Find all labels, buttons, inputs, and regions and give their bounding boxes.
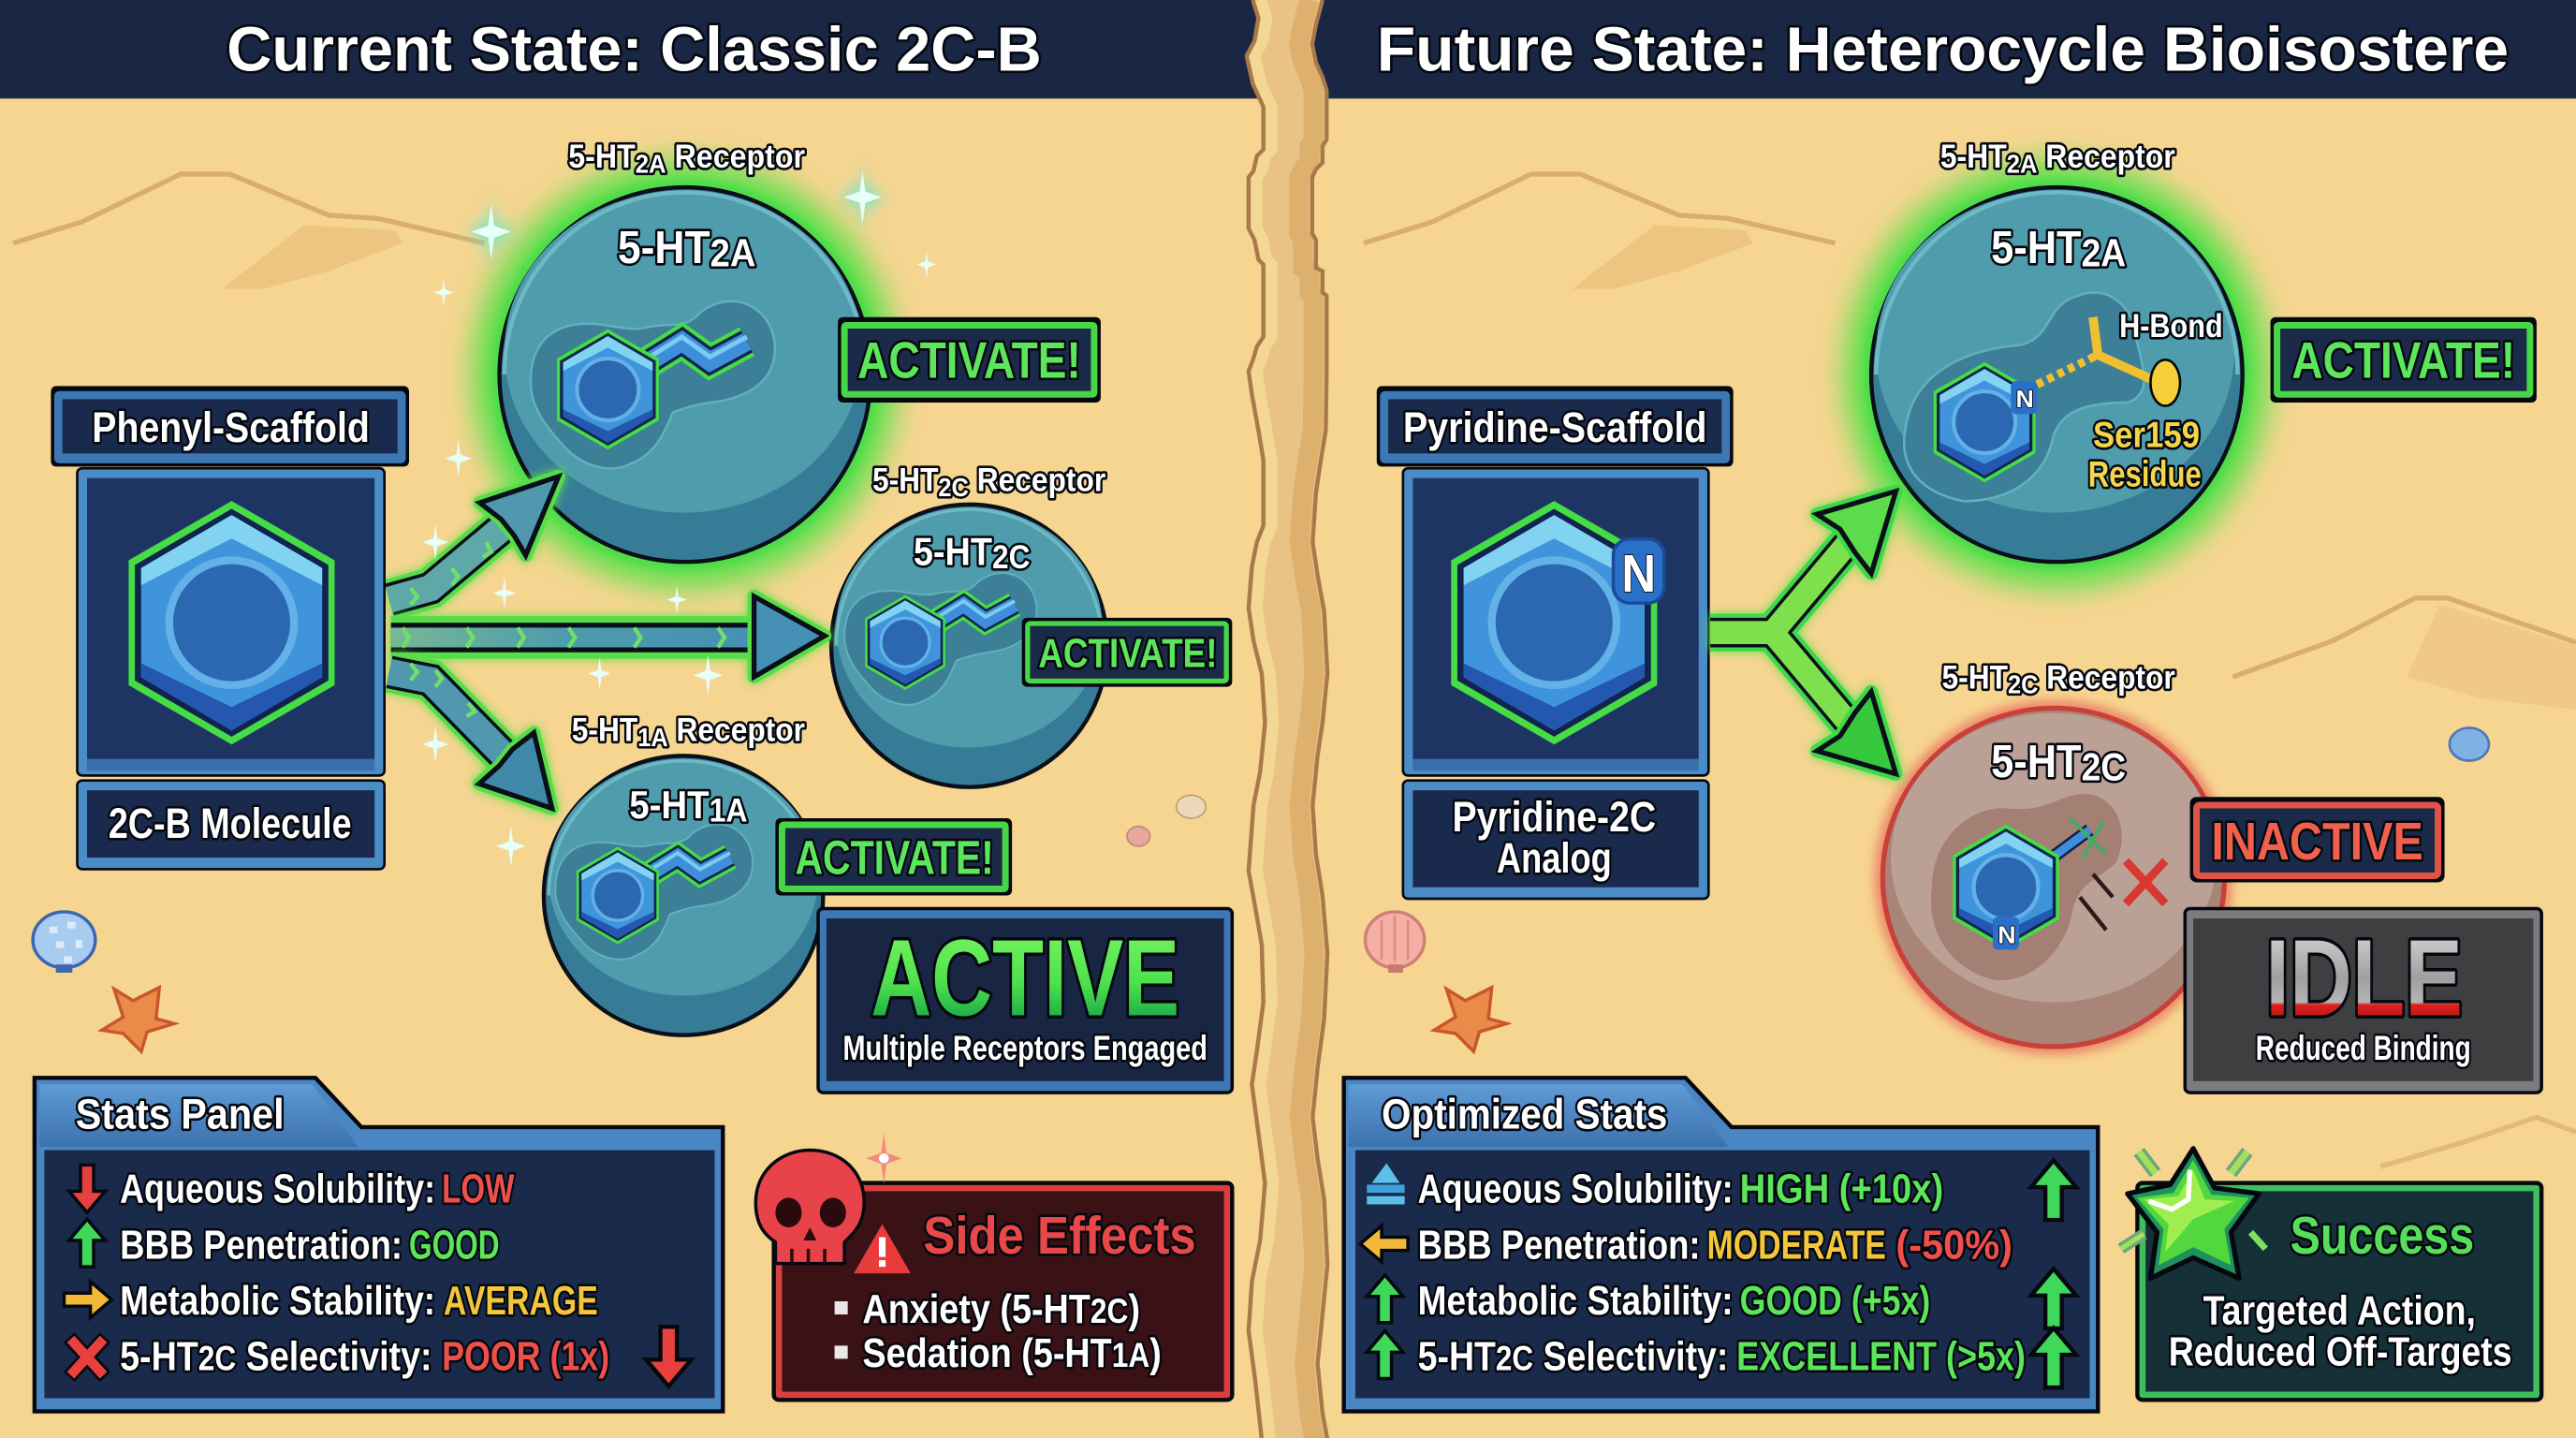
badge: INACTIVE — [2190, 797, 2445, 882]
stat: selectivity: POOR (1x) — [442, 1334, 609, 1380]
header: current state: Current State: Classic 2C-B — [227, 15, 1042, 84]
icon: pyridine hexagon — [1451, 501, 1657, 744]
receptor: 5-HT2C left — [831, 505, 1107, 787]
receptor: 5-HT2A left — [473, 161, 897, 588]
icon: hydrogen bond to Ser159 — [2037, 317, 2180, 405]
stat: aqueous solubility: Aqueous Solubility: — [1418, 1167, 1734, 1212]
arrow: phenyl to 5-HT1A — [389, 664, 552, 808]
stat: BBB penetration — [1360, 1222, 2012, 1268]
stat: BBB penetration: BBB Penetration: — [120, 1222, 402, 1268]
status: IDLE: IDLE — [2265, 917, 2463, 1039]
status: IDLE — [2185, 909, 2541, 1093]
label: 5-HT1A in circle: 1A — [710, 793, 748, 829]
starfish: right — [1434, 988, 1506, 1051]
label: Pyridine-2C Analog: Pyridine-2C — [1453, 793, 1656, 841]
label: 5-HT1A receptor: 1A — [637, 723, 668, 752]
stat: selectivity — [69, 1327, 691, 1387]
stat: BBB penetration: BBB Penetration: — [1418, 1222, 1701, 1268]
header: current state — [0, 0, 1268, 98]
label: H-Bond: H-Bond — [2119, 308, 2223, 345]
badge: ACTIVATE right — [2271, 317, 2537, 403]
label: 5-HT2C receptor: 2C — [938, 473, 969, 502]
panel: stats — [35, 1078, 723, 1412]
shell: pink — [1365, 912, 1425, 973]
arrow: pyridine fork to receptors — [1710, 492, 1895, 774]
list: Sedation: Sedation (5-HT1A) — [862, 1330, 1162, 1376]
icon: phenyl molecule — [865, 595, 1015, 690]
sparkles: activation — [422, 163, 936, 867]
label: Ser159 Residue: Ser159 — [2093, 415, 2200, 455]
header: future state: Future State: Heterocycle Bioisostere — [1377, 15, 2509, 84]
icon: warning triangle — [851, 1221, 914, 1275]
label: Phenyl-Scaffold: Phenyl-Scaffold — [92, 404, 370, 451]
stat: selectivity: EXCELLENT (>5x) — [1736, 1334, 2026, 1380]
heading: Side Effects: Side Effects — [923, 1206, 1196, 1265]
stat: aqueous solubility: HIGH (+10x) — [1740, 1167, 1943, 1212]
status: ACTIVE: Multiple Receptors Engaged — [842, 1029, 1208, 1067]
dune: upper right — [1364, 174, 1835, 289]
label: 5-HT2C in circle: 5-HT — [914, 530, 1001, 574]
badge: ACTIVATE 1A left — [775, 818, 1012, 895]
status: ACTIVE — [818, 909, 1232, 1093]
text: Targeted Action — [2169, 1288, 2512, 1374]
label: Ser159 Residue: Residue — [2088, 454, 2202, 494]
label: Phenyl-Scaffold — [51, 386, 409, 466]
label: 5-HT2A receptor: 5-HT — [568, 139, 641, 175]
status: IDLE: Reduced Binding — [2256, 1029, 2471, 1067]
divider: sand path between panels — [1247, 0, 1327, 1438]
label: 5-HT2C in circle: 2C — [992, 539, 1030, 576]
stat: selectivity: 5-HT2C Selectivity: — [1418, 1334, 1728, 1380]
badge: ACTIVATE 2A left — [838, 317, 1101, 403]
label: 5-HT2A receptor right: Receptor — [2037, 139, 2175, 175]
stat: BBB penetration: (-50%) — [1895, 1222, 2012, 1268]
stat: metabolic stability — [1367, 1269, 2076, 1328]
panel: side effects — [774, 1183, 1232, 1400]
header: future state — [1311, 0, 2576, 98]
label: Pyridine-Scaffold — [1377, 386, 1734, 466]
panel: success — [2137, 1183, 2541, 1400]
stat: metabolic stability: GOOD (+5x) — [1740, 1278, 1930, 1324]
icon: benzene hexagon — [128, 501, 335, 744]
stat: aqueous solubility: Aqueous Solubility: — [120, 1167, 435, 1212]
label: Pyridine-Scaffold: Pyridine-Scaffold — [1403, 404, 1707, 451]
icon: pyridine molecule: N — [2016, 385, 2034, 413]
dune: upper left — [13, 174, 485, 289]
status: ACTIVE: ACTIVE — [871, 917, 1179, 1039]
stat: BBB penetration: MODERATE — [1707, 1222, 1886, 1268]
label: 5-HT1A in circle: 5-HT — [629, 783, 717, 827]
badge: INACTIVE: INACTIVE — [2211, 812, 2423, 871]
icon: N badge: N — [1621, 544, 1656, 603]
label: 5-HT2A in circle: 2A — [2082, 230, 2126, 274]
label: 5-HT2A receptor: 2A — [636, 149, 666, 178]
arrow: phenyl to 5-HT2A — [389, 477, 559, 605]
label: 5-HT2C receptor right: Receptor — [2038, 659, 2175, 696]
stat: metabolic stability: Metabolic Stability: — [1418, 1278, 1734, 1324]
icon: red sparkle — [866, 1133, 902, 1183]
icon: skull — [755, 1151, 864, 1264]
stat: selectivity: 5-HT2C Selectivity: — [120, 1334, 432, 1380]
badge: ACTIVATE 2C left — [1022, 618, 1232, 687]
icon: phenyl molecule — [557, 330, 747, 449]
icon: green star — [2121, 1149, 2265, 1278]
arrow: phenyl to 5-HT2C — [391, 596, 825, 677]
stat: BBB penetration: GOOD — [409, 1222, 500, 1268]
icon: N badge — [1614, 539, 1664, 603]
dune: middle right — [2232, 598, 2576, 710]
stat: metabolic stability: AVERAGE — [444, 1278, 598, 1324]
label: 5-HT2C receptor: 5-HT — [872, 462, 945, 499]
heading: Success: Success — [2291, 1206, 2474, 1265]
label: Pyridine-2C Analog: Analog — [1497, 834, 1612, 882]
card: phenyl scaffold — [77, 468, 385, 775]
label: 5-HT2A in circle: 5-HT — [618, 223, 720, 273]
label: 5-HT2C receptor right: 2C — [2008, 670, 2038, 699]
label: 5-HT2C in circle: 2C — [2082, 745, 2126, 789]
stat: aqueous solubility: LOW — [442, 1167, 515, 1212]
label: 2C-B Molecule: 2C-B Molecule — [109, 800, 352, 847]
label: 5-HT1A receptor: Receptor — [668, 712, 805, 749]
text: Targeted Action: Targeted Action, — [2203, 1288, 2476, 1334]
icon: pyridine molecule — [1934, 362, 2037, 482]
icon: pyridine molecule blocked — [1953, 818, 2106, 950]
dune: lower right — [2380, 1117, 2576, 1167]
label: 5-HT2C receptor right: 5-HT — [1942, 659, 2015, 696]
panel: optimized stats — [1344, 1078, 2098, 1412]
pebble: pink — [1127, 827, 1150, 846]
label: 5-HT2A receptor right: 5-HT — [1940, 139, 2013, 175]
label: 5-HT2A in circle: 5-HT — [1991, 223, 2093, 273]
label: Ser159 Residue — [2088, 415, 2202, 494]
stat: selectivity — [1367, 1328, 2076, 1387]
heading: Stats Panel: Stats Panel — [76, 1091, 285, 1138]
receptor: 5-HT2C inactive — [1875, 700, 2232, 1055]
card: pyridine scaffold — [1403, 468, 1708, 775]
label: 5-HT1A receptor: 5-HT — [572, 712, 645, 749]
badge: ACTIVATE 2C left: ACTIVATE! — [1038, 631, 1218, 677]
label: 5-HT2A receptor right: 2A — [2007, 149, 2037, 178]
pebble: tan — [1177, 795, 1206, 818]
icon: pyridine molecule blocked: N — [1998, 920, 2016, 948]
starfish: left — [102, 988, 174, 1051]
label: 5-HT2A receptor: Receptor — [666, 139, 805, 175]
label: Pyridine-2C Analog — [1403, 781, 1708, 899]
icon: phenyl molecule — [577, 846, 730, 945]
receptor: 5-HT1A left — [544, 756, 823, 1035]
list: Anxiety: Anxiety (5-HT2C) — [862, 1286, 1140, 1332]
label: 5-HT2A in circle: 2A — [710, 230, 755, 274]
badge: ACTIVATE 1A left: ACTIVATE! — [795, 831, 994, 885]
label: 2C-B Molecule — [77, 781, 385, 869]
label: 5-HT2C in circle: 5-HT — [1991, 737, 2093, 787]
heading: Optimized Stats: Optimized Stats — [1382, 1091, 1667, 1138]
receptor: 5-HT2A right — [1845, 161, 2269, 588]
text: Targeted Action: Reduced Off-Targets — [2169, 1328, 2512, 1374]
shell: blue — [33, 912, 95, 973]
stat: aqueous solubility — [1367, 1160, 2076, 1220]
icon: steric clash marks — [2080, 861, 2165, 930]
badge: ACTIVATE 2A left: ACTIVATE! — [857, 332, 1081, 389]
shell: blue right — [2450, 727, 2489, 761]
stat: metabolic stability: Metabolic Stability: — [120, 1278, 435, 1324]
label: 5-HT2C receptor: Receptor — [969, 462, 1105, 499]
badge: ACTIVATE right: ACTIVATE! — [2291, 332, 2515, 389]
